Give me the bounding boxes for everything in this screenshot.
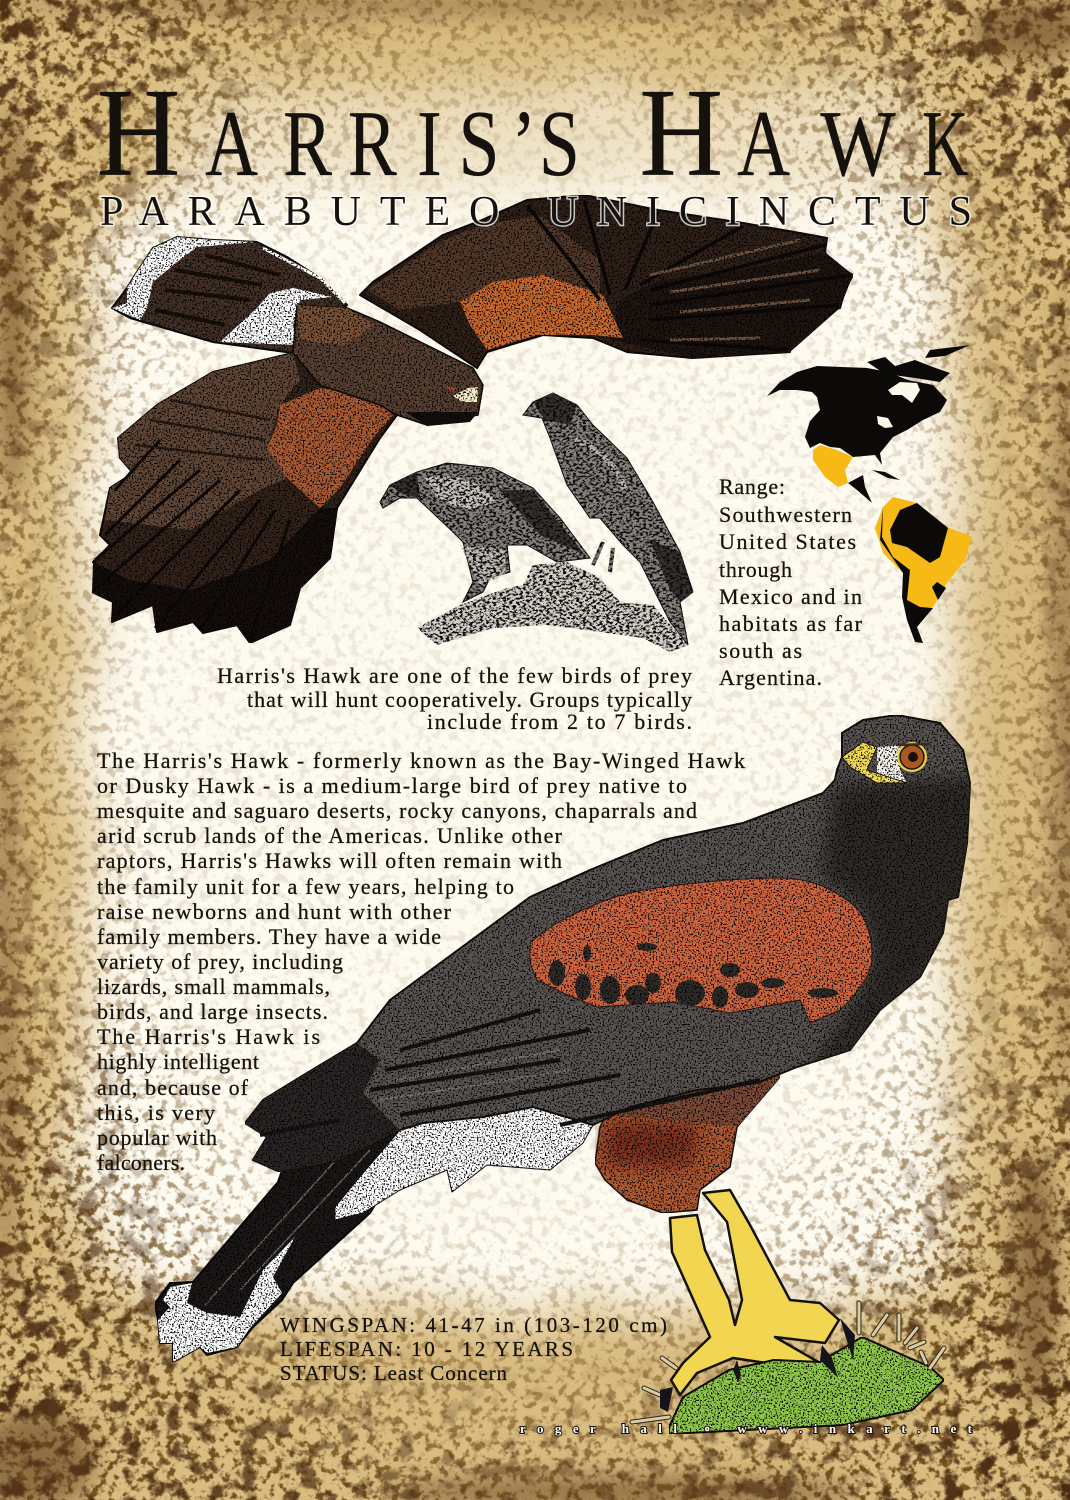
cactus spines xyxy=(632,1303,944,1422)
title: A xyxy=(737,92,790,196)
range text: Argentina. xyxy=(719,665,822,690)
engraving: branch xyxy=(417,562,688,652)
engraving: two perched hawks xyxy=(380,393,693,652)
perched hawk: thigh xyxy=(595,1057,780,1213)
caption: cooperative hunting: Harris's Hawk are one of the few birds of prey xyxy=(217,663,692,688)
range text: habitats as far xyxy=(719,611,863,636)
range text: south as xyxy=(719,638,802,663)
cactus pad xyxy=(669,1337,944,1434)
map: South America range xyxy=(875,497,972,610)
statistics: WINGSPAN: 41-47 in (103-120 cm) xyxy=(280,1313,667,1337)
caption: cooperative hunting: that will hunt cooperatively. Groups typically xyxy=(247,687,692,712)
main description text: variety of prey, including xyxy=(97,949,343,974)
perched hawk: rufous shoulder xyxy=(530,878,872,1023)
main description text: mesquite and saguaro deserts, rocky canyons, chaparrals and xyxy=(97,798,697,823)
flying hawk illustration xyxy=(92,195,853,643)
map: North America xyxy=(767,366,947,465)
perched hawk: wing spots xyxy=(549,943,838,1008)
map: South America black xyxy=(880,503,948,643)
main description text: lizards, small mammals, xyxy=(97,974,330,999)
large perched hawk illustration xyxy=(155,715,990,1434)
main description text: The Harris's Hawk - formerly known as the Bay-Winged Hawk xyxy=(97,748,745,773)
main description text: highly intelligent xyxy=(97,1049,259,1074)
flying hawk: far wing xyxy=(360,195,853,368)
title: ARRIS’S xyxy=(205,92,580,196)
main description text: family members. They have a wide xyxy=(97,924,441,949)
range text: United States xyxy=(719,529,856,554)
perched hawk: legs and feet xyxy=(670,1190,839,1395)
title: K xyxy=(922,92,968,196)
main description text: and, because of xyxy=(97,1075,249,1100)
perched hawk: tail xyxy=(155,1107,593,1362)
credit: roger hall ∘ www.inkart.net xyxy=(520,1421,973,1436)
range text: Mexico and in xyxy=(719,584,862,609)
main description text: raptors, Harris's Hawks will often remain with xyxy=(97,848,562,873)
engraving: left hawk xyxy=(380,463,590,602)
flying hawk: near wing xyxy=(92,353,397,643)
perched hawk: chest shading xyxy=(799,768,970,1065)
caption: cooperative hunting xyxy=(217,663,692,734)
title xyxy=(97,64,968,203)
flying hawk: body and head xyxy=(293,305,483,426)
main description text: raise newborns and hunt with other xyxy=(97,899,452,924)
perched hawk: undertail coverts xyxy=(335,1107,593,1220)
range text: Southwestern xyxy=(719,502,852,527)
statistics: LIFESPAN: 10 - 12 YEARS xyxy=(280,1337,573,1361)
flying hawk: tail xyxy=(112,237,347,353)
perched hawk: body and head xyxy=(245,715,990,1172)
main description text: this, is very xyxy=(97,1100,215,1125)
main description text: or Dusky Hawk - is a medium-large bird of prey native to xyxy=(97,773,687,798)
range text: Range: xyxy=(719,474,785,499)
engraving: right hawk xyxy=(523,393,693,645)
subtitle: PARABUTEO UNICINCTUS xyxy=(100,189,972,235)
main description text: birds, and large insects. xyxy=(97,999,328,1024)
title: H xyxy=(97,64,180,203)
main description text: the family unit for a few years, helping to xyxy=(97,874,514,899)
caption: cooperative hunting: include from 2 to 7 birds. xyxy=(427,709,692,734)
title: H xyxy=(639,64,723,203)
map: Great Lakes xyxy=(877,416,893,428)
map: Arctic islands xyxy=(867,345,970,382)
talons xyxy=(660,1318,855,1412)
map: Hudson Bay xyxy=(888,382,920,403)
main description text: falconers. xyxy=(97,1150,185,1175)
main description text xyxy=(97,748,745,1175)
perched hawk: face xyxy=(877,745,907,783)
range text: through xyxy=(719,557,792,582)
main description text: popular with xyxy=(97,1125,217,1150)
range map xyxy=(767,345,972,643)
map: Mexico range xyxy=(813,445,853,487)
main description text: arid scrub lands of the Americas. Unlike other xyxy=(97,823,563,848)
perched hawk: dark primaries xyxy=(245,1043,400,1172)
map: Central America and Caribbean xyxy=(848,470,900,503)
perched hawk: beak xyxy=(842,742,907,783)
title: W xyxy=(820,91,896,195)
perched hawk: eye xyxy=(897,742,930,772)
range text xyxy=(719,474,863,690)
statistics: STATUS: Least Concern xyxy=(280,1361,508,1385)
main description text: The Harris's Hawk is xyxy=(97,1024,320,1049)
statistics xyxy=(280,1313,667,1385)
